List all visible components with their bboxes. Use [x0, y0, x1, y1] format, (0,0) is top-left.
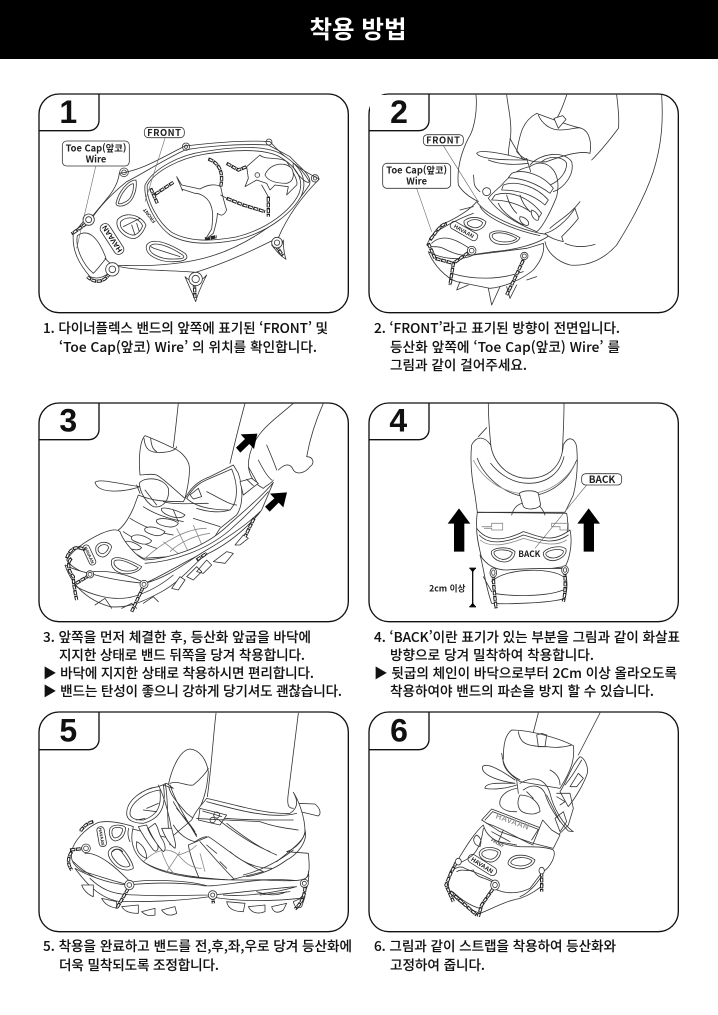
caption 4: 착용하여야 밴드의 파손을 방지 할 수 있습니다.	[390, 680, 654, 700]
label: Toe Cap Wire	[383, 163, 451, 188]
step number 5: 5	[59, 713, 77, 749]
2cm dimension: 2cm 이상	[429, 583, 466, 595]
panel 1: band layout	[39, 94, 348, 313]
step number 2	[369, 94, 429, 131]
leg	[207, 713, 298, 808]
step number 2: 2	[390, 94, 408, 130]
leg	[533, 713, 600, 755]
laces	[482, 765, 573, 832]
caption 4: 방향으로 당겨 밀착하여 착용합니다.	[390, 644, 594, 664]
tongue	[168, 749, 208, 818]
crampon band stretched	[67, 482, 273, 585]
caption 5	[43, 935, 352, 974]
step number 3: 3	[59, 403, 77, 439]
label: Toe Cap Wire: Wire	[406, 173, 428, 187]
caption 5: 더욱 밀착되도록 조정합니다.	[59, 954, 219, 974]
label: BACK	[582, 471, 622, 486]
right hand cuff	[545, 208, 578, 242]
panel 3: pulling the band back	[39, 403, 348, 622]
cuff and tongue	[502, 730, 588, 835]
BACK tab of band	[477, 528, 571, 608]
sole and lugs	[65, 512, 260, 612]
step number 1: 1	[59, 94, 77, 130]
caption 6	[374, 935, 616, 974]
laces and upper	[477, 138, 572, 232]
band	[450, 825, 554, 897]
inner chains and plates	[151, 155, 297, 240]
panel 6: strap on	[369, 712, 678, 932]
heel tab	[297, 803, 320, 816]
caption 2: 그림과 같이 걸어주세요.	[390, 354, 527, 374]
rings and end chains	[72, 139, 319, 302]
caption 3: ▶ 바닥에 지지한 상태로 착용하시면 편리합니다.	[43, 662, 314, 682]
caption 1	[43, 317, 328, 356]
panel 2: fitting on the toe	[369, 94, 678, 313]
leg	[488, 403, 564, 463]
strap	[482, 809, 560, 848]
shoe body	[129, 792, 309, 882]
HAVAAN label: HAVAAN	[100, 224, 124, 254]
label: BACK: BACK	[589, 471, 615, 486]
sole, spikes and chains	[428, 223, 544, 305]
arrow: left up	[448, 508, 470, 552]
toe, sole and chains	[446, 858, 544, 917]
title bar	[0, 0, 718, 59]
caption 6: 고정하여 줍니다.	[390, 954, 485, 974]
crampon band and toe: HAVAAN	[97, 827, 106, 846]
arrow: right up	[577, 508, 600, 552]
leg and hand lines	[173, 403, 323, 488]
left hand and leg lines	[458, 95, 662, 265]
2cm dimension	[429, 568, 476, 607]
caption 1: 1. 다이너플렉스 밴드의 앞쪽에 표기된 ‘FRONT’ 및	[43, 317, 328, 337]
crampon band: HAVAAN	[452, 224, 475, 240]
label: FRONT: FRONT	[147, 125, 181, 139]
crampon band and toe	[71, 822, 302, 889]
band: HAVAAN	[470, 857, 494, 875]
caption 6: 6. 그림과 같이 스트랩을 착용하여 등산화와	[374, 935, 616, 955]
crampon band stretched: HAVAAN	[83, 546, 95, 564]
heel of shoe	[471, 428, 577, 542]
caption 3: ▶ 밴드는 탄성이 좋으니 강하게 당기셔도 괜찮습니다.	[43, 680, 342, 700]
caption 4: ▶ 뒷굽의 체인이 바닥으로부터 2Cm 이상 올라오도록	[374, 662, 677, 682]
crampon band	[427, 202, 550, 255]
leader lines	[77, 138, 165, 248]
arrow: upper	[236, 434, 257, 453]
caption 5: 5. 착용을 완료하고 밴드를 전,후,좌,우로 당겨 등산화에	[43, 935, 352, 955]
label: Toe Cap Wire: Toe Cap(앞코)	[66, 141, 126, 155]
caption 3: 지지한 상태로 밴드 뒤쪽을 당겨 착용합니다.	[59, 644, 305, 664]
caption 1: ‘Toe Cap(앞코) Wire’ 의 위치를 확인합니다.	[59, 336, 317, 356]
strap: HAVAAN	[495, 811, 530, 832]
leader lines	[417, 146, 478, 232]
label: FRONT: FRONT	[426, 132, 460, 146]
band outline	[73, 141, 319, 278]
caption 2: 2. ‘FRONT’라고 표기된 방향이 전면입니다.	[374, 317, 620, 337]
caption 3	[43, 626, 342, 700]
laces	[127, 783, 207, 858]
caption 4: 4. ‘BACK’이란 표기가 있는 부분을 그림과 같이 화살표	[374, 626, 680, 646]
caption 3: 3. 앞쪽을 먼저 체결한 후, 등산화 앞굽을 바닥에	[43, 626, 311, 646]
band holes	[116, 163, 309, 262]
sole and lugs	[69, 822, 309, 916]
caption 2	[374, 317, 620, 374]
caption 4	[374, 626, 680, 700]
leader line	[535, 485, 587, 548]
shoe cuff	[517, 113, 591, 162]
label: Toe Cap Wire: Toe Cap(앞코)	[386, 163, 447, 177]
caption 2: 등산화 앞쪽에 ‘Toe Cap(앞코) Wire’ 를	[390, 336, 620, 356]
panel 5: side view finished	[39, 712, 348, 932]
shoe upper	[95, 465, 258, 558]
arrow: lower	[265, 492, 287, 512]
label: Toe Cap Wire: Wire	[86, 151, 107, 165]
step number 6: 6	[390, 713, 408, 749]
panel 4: back view	[369, 403, 678, 622]
FRONT mark: FRONT	[142, 207, 158, 224]
band: FRONT	[490, 837, 505, 849]
title bar: 착용 방법	[309, 11, 407, 46]
label: Toe Cap Wire	[62, 141, 129, 166]
shoe cuff and tongue	[139, 436, 189, 498]
label: BACK on band: BACK	[518, 548, 541, 560]
step number 4: 4	[389, 403, 407, 439]
